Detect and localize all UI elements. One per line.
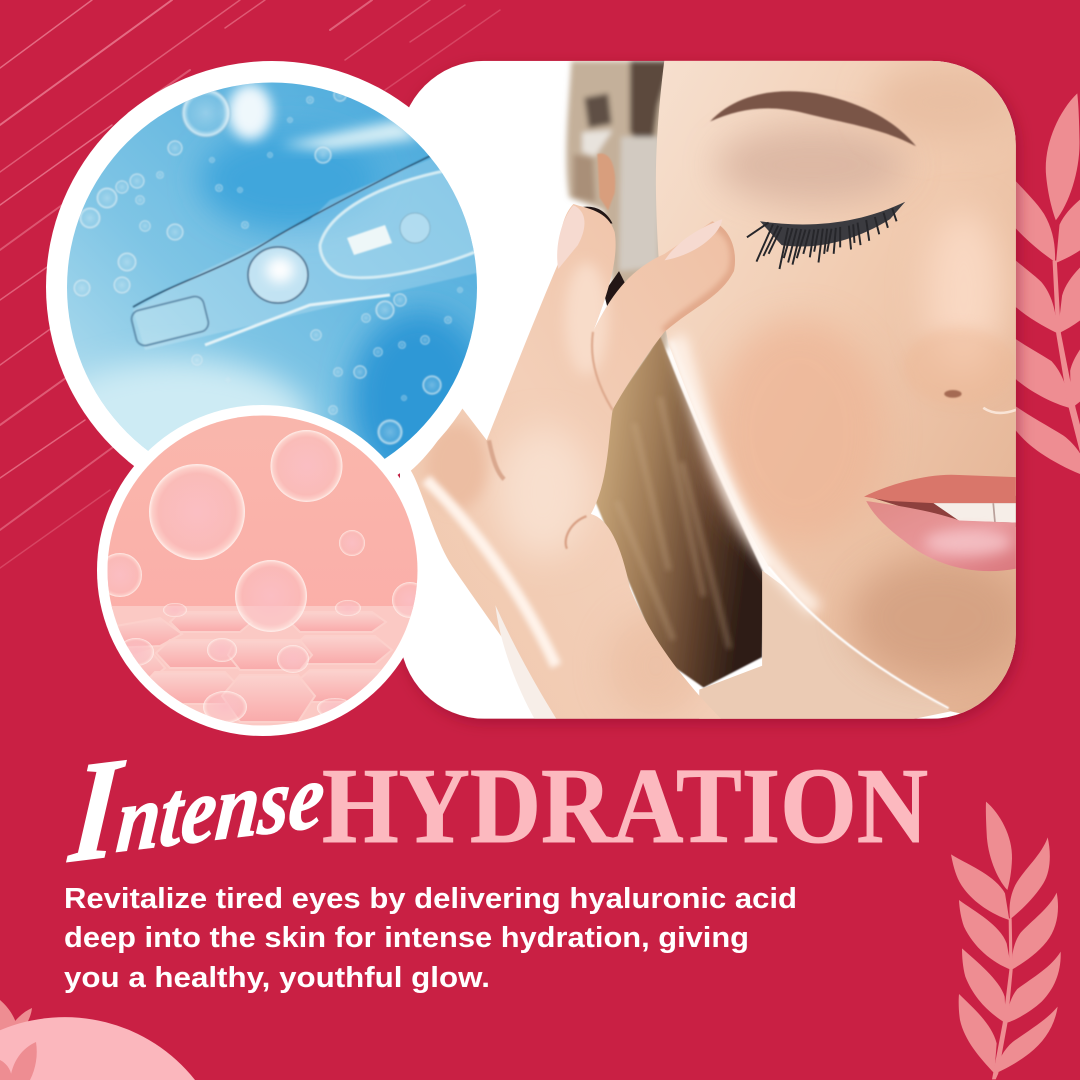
- diagonal stripes pattern: [0, 0, 500, 568]
- circle: skin moisture bubbles: [97, 405, 428, 736]
- circle: hyaluronic ampoule: [46, 61, 477, 475]
- body text: you a healthy, youthful glow.: [64, 962, 490, 994]
- title: HYDRATION: HYDRATION: [322, 747, 928, 866]
- title: Intense: ntense: [113, 744, 329, 873]
- face shading: [671, 63, 1024, 708]
- lips: [864, 475, 1018, 571]
- upper hair: [566, 61, 671, 349]
- leaf branch: top right: [972, 90, 1080, 493]
- water bubbles: [73, 88, 463, 445]
- leaf branch: bottom right: [951, 802, 1061, 1079]
- ampoule: [130, 155, 490, 350]
- lower hair: [595, 271, 764, 687]
- nose details: [944, 390, 1018, 413]
- eyebrow: [710, 91, 916, 146]
- body text: [64, 883, 797, 994]
- body text: Revitalize tired eyes by delivering hyaluronic acid: [64, 883, 797, 915]
- neck: [699, 570, 951, 727]
- eye lashes: [747, 202, 905, 269]
- title: Intense: [63, 703, 332, 894]
- face: [656, 59, 1020, 727]
- body text: deep into the skin for intense hydration, giving: [64, 922, 749, 954]
- pink bubbles: [98, 430, 428, 723]
- title: Intense: I: [65, 727, 134, 894]
- bottom left decoration: pink half circle with leaves: [0, 1000, 195, 1080]
- hand and fingers: [411, 204, 735, 719]
- panel: woman photo: [400, 59, 1024, 727]
- skin cells: [118, 613, 390, 726]
